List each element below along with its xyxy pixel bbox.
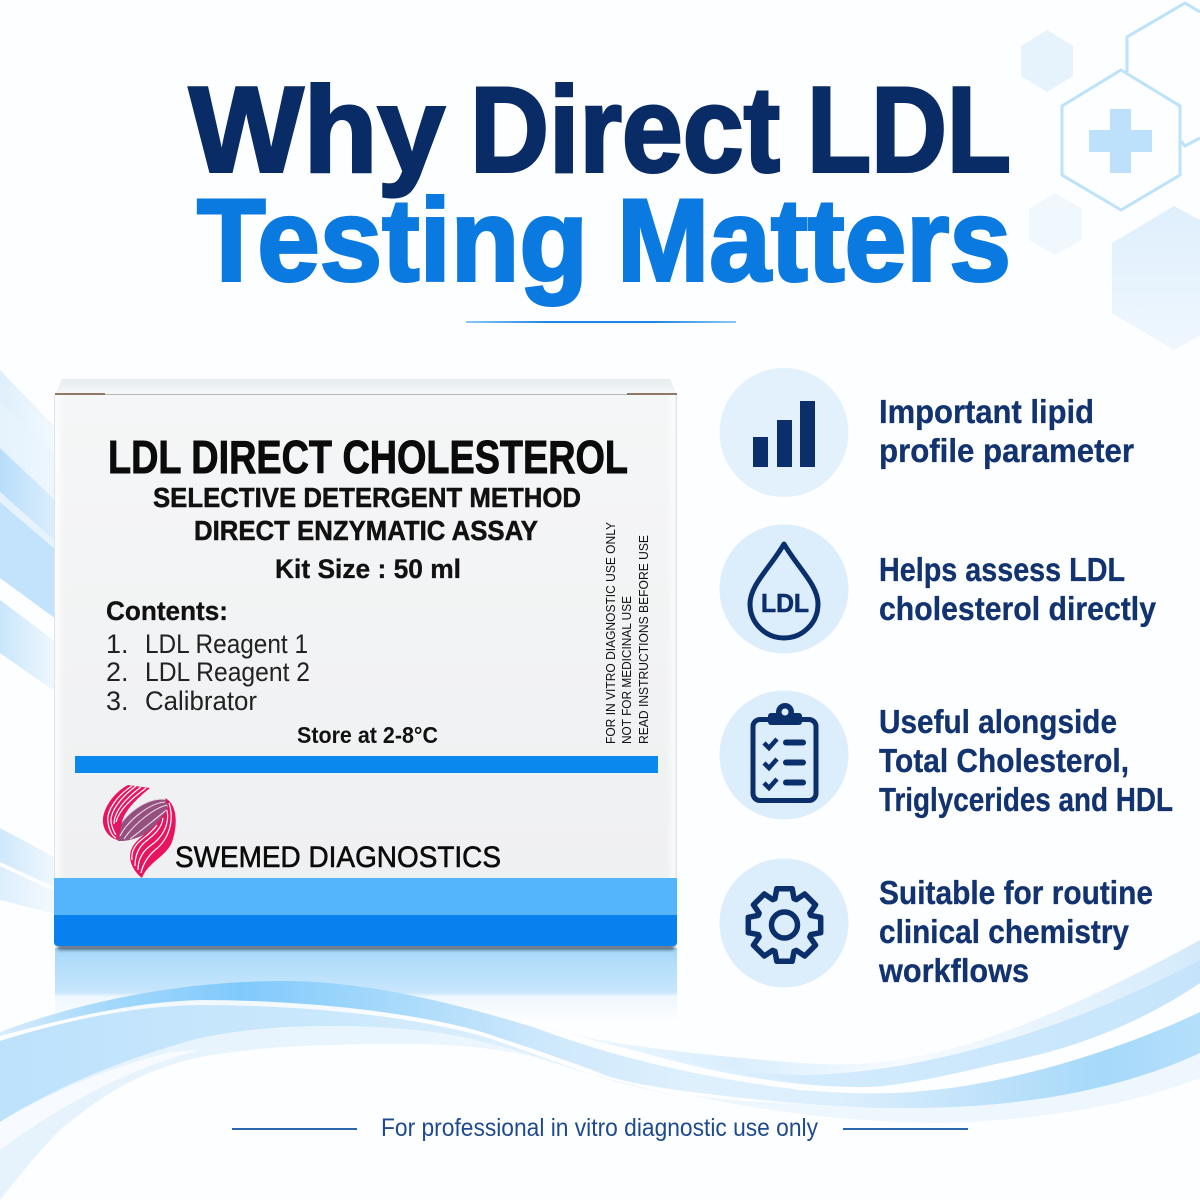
contents list: 3. [106,686,129,716]
title: Direct [470,62,780,198]
box main heading: LDL DIRECT CHOLESTEROL [108,431,628,483]
feature text: profile parameter [879,432,1134,469]
vertical notices: READ INSTRUCTIONS BEFORE USE [636,535,651,744]
feature: lipid profile [720,368,1134,497]
contents list: Calibrator [145,686,257,716]
icon: gear [720,858,848,988]
feature text [879,703,1173,818]
feature text: Useful alongside [879,703,1117,740]
product box [54,379,677,950]
background: left lower wave [0,828,56,914]
title line 2: Matters [617,174,1011,306]
box top flap [55,379,677,395]
box dark blue band [54,915,677,946]
title: Why [189,62,445,198]
box front face [54,395,677,879]
feature: LDL directly [720,524,1157,654]
background: flowing bottom waves [0,940,1200,1200]
feature text: clinical chemistry [879,913,1130,950]
contents list: 1. [106,629,129,659]
title: LDL [807,62,1011,198]
title [189,62,1011,198]
feature: alongside other tests [720,690,1173,820]
box blue bar [75,756,658,773]
box floor reflection [55,948,677,1026]
title underline [466,321,736,323]
kit size: Kit Size : 50 ml [275,554,461,584]
icon: clipboard checklist [720,690,848,820]
feature text: Important lipid [879,393,1094,430]
feature text [879,551,1157,627]
vertical notices: FOR IN VITRO DIAGNOSTIC USE ONLY [603,522,618,744]
background: left chevron stripes [0,370,56,692]
feature text: Helps assess LDL [879,551,1125,588]
contents list: Contents: [106,596,228,626]
vertical notices: NOT FOR MEDICINAL USE [619,596,634,744]
storage note: Store at 2-8°C [297,722,438,748]
icon: bar chart [720,368,848,497]
feature text: cholesterol directly [879,590,1157,627]
box subheading 2: DIRECT ENZYMATIC ASSAY [194,515,538,546]
feature: routine workflows [720,858,1153,989]
feature text: Total Cholesterol, [879,742,1129,779]
feature text [879,393,1134,469]
box subheading 1: SELECTIVE DETERGENT METHOD [153,482,581,513]
contents list [106,596,310,716]
brand name: SWEMED DIAGNOSTICS [175,841,501,874]
feature text: Suitable for routine [879,874,1153,911]
background: hexagon cluster with medical cross [1021,3,1200,350]
contents list: LDL Reagent 1 [145,629,308,659]
footer note: For professional in vitro diagnostic use only [381,1114,818,1142]
box light blue band [54,878,677,915]
icon: LDL drop [720,524,848,654]
contents list: 2. [106,657,129,687]
icon: LDL drop: LDL [761,588,809,618]
feature text [878,874,1153,989]
feature text: workflows [878,952,1029,989]
title line 2 [197,174,1011,306]
title line 2: Testing [197,174,588,306]
vertical notices [603,522,651,744]
logo ribbon [103,785,176,878]
contents list: LDL Reagent 2 [145,657,310,687]
box shadow [57,944,675,950]
